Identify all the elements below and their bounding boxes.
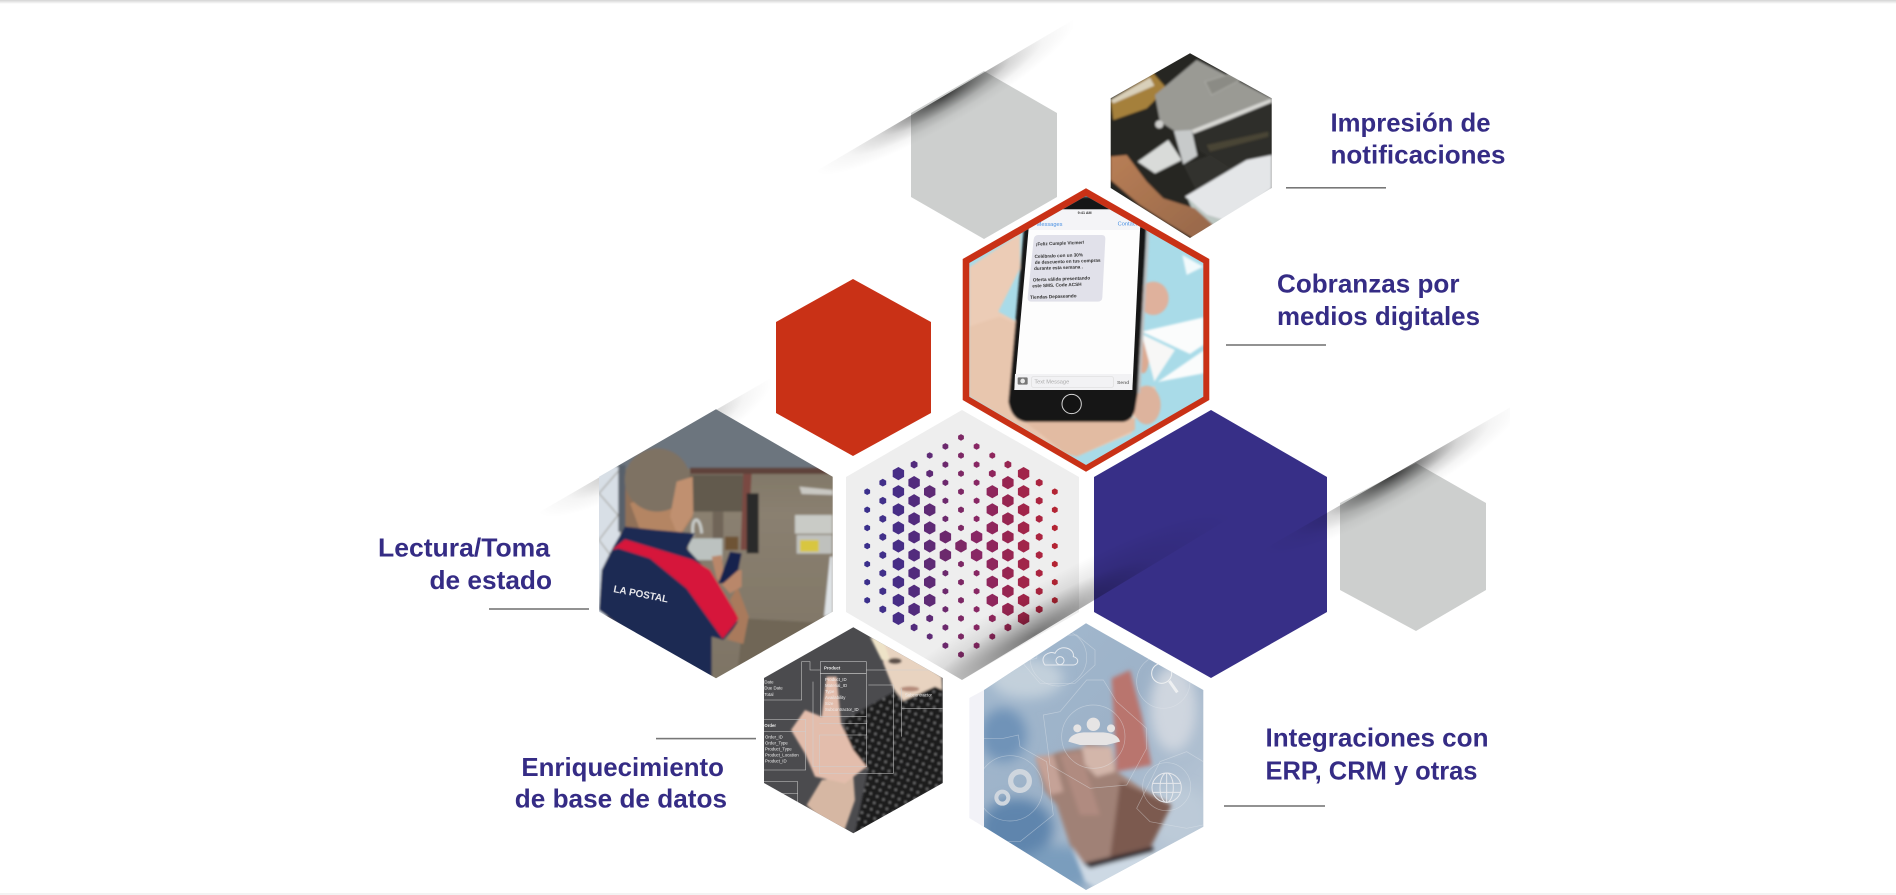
- photo: meter reader: [599, 409, 833, 678]
- diagram labels: Date: [764, 679, 774, 684]
- fold shadow across purple and right grey hexagons: [1301, 416, 1496, 532]
- icon: cloud: [1043, 648, 1078, 665]
- fold shadow across dotted and purple hexagons: [932, 550, 1170, 680]
- label: integraciones con erp crm y otras: Integraciones con: [1266, 723, 1488, 753]
- diagram labels: Order_Type: [765, 741, 788, 746]
- leader line: [489, 608, 589, 610]
- diagram labels: Due Date: [764, 686, 783, 691]
- diagram lines: [764, 662, 943, 807]
- diagram labels: Material_ID: [825, 683, 847, 688]
- diagram labels: Product: [824, 666, 841, 671]
- bottom page edge: [0, 893, 1896, 895]
- photo: woman and database diagram: [764, 627, 943, 834]
- diagram labels: Product_Type: [765, 747, 792, 752]
- phone interface labels: [1034, 211, 1138, 386]
- fold shadow on top grey hexagon: [843, 36, 1048, 158]
- label: enriquecimiento de base de datos: [515, 752, 727, 814]
- diagram labels: Subcontractor: [905, 693, 933, 698]
- red hexagon: [776, 279, 931, 456]
- label: enriquecimiento de base de datos: Enriquecimiento: [521, 752, 724, 782]
- photo: hand touching gear icons: [970, 623, 1204, 890]
- icon: people group: [1068, 718, 1120, 745]
- phone interface labels: Contact: [1118, 221, 1138, 227]
- diagram labels: Product_ID: [765, 759, 787, 764]
- icon: gears: [996, 772, 1029, 804]
- dotted hexagon panel: [846, 410, 1079, 680]
- label: enriquecimiento de base de datos: de base de datos: [515, 784, 727, 814]
- diagram labels: Availability: [825, 695, 846, 700]
- pale strip left of photo: [969, 690, 984, 827]
- label: cobranzas por medios digitales: [1277, 269, 1480, 331]
- label: lectura toma de estado: Lectura/Toma: [378, 532, 551, 562]
- phone interface labels: Messages: [1037, 222, 1063, 228]
- diagram labels: [764, 666, 933, 764]
- purple hexagon: [1094, 410, 1327, 678]
- diagram labels: Order_ID: [765, 735, 783, 740]
- label: lectura toma de estado: de estado: [430, 565, 552, 595]
- diagram labels: Product_Location: [765, 753, 799, 758]
- diagram labels: Subcontractor_ID: [825, 707, 859, 712]
- phone interface labels: Send: [1117, 380, 1129, 386]
- shirt logo text: LA POSTAL: [612, 584, 669, 606]
- diagram labels: Product_ID: [825, 677, 847, 682]
- leader line: [1286, 187, 1386, 189]
- message text: ¡Feliz Cumple Vicmer!: [1036, 240, 1085, 247]
- diagram labels: Size: [825, 701, 834, 706]
- diagram labels: Type: [825, 689, 835, 694]
- top page shadow: [0, 0, 1896, 4]
- icon: globe: [1152, 773, 1181, 802]
- red hexagon frame: [963, 188, 1209, 472]
- leader line: [656, 738, 756, 739]
- phone interface labels: Text Message: [1034, 379, 1069, 385]
- message text: Tiendas Depaseando: [1030, 293, 1077, 300]
- label: cobranzas por medios digitales: medios digitales: [1277, 301, 1480, 331]
- label: integraciones con erp crm y otras: [1266, 723, 1488, 785]
- icon: magnifier: [1152, 663, 1177, 692]
- fold shadow beside lectura photo: [563, 392, 748, 502]
- gear outlines: [977, 629, 1203, 842]
- photo: phone with SMS message: [962, 188, 1210, 472]
- grey hexagon top: [911, 71, 1057, 239]
- message text: de descuento en tus compras: [1035, 258, 1101, 265]
- photo: printing machine: [1110, 53, 1272, 238]
- diagram labels: Order: [764, 723, 776, 728]
- label: lectura toma de estado: [378, 532, 552, 595]
- message text: [1028, 239, 1102, 300]
- leader line: [1226, 344, 1326, 346]
- label: cobranzas por medios digitales: Cobranzas por: [1277, 269, 1460, 299]
- message text: Celébralo con un 30%: [1035, 252, 1084, 259]
- diagram labels: Total: [764, 692, 774, 697]
- label: impresión de notificaciones: notificaciones: [1330, 139, 1506, 169]
- grey hexagon right: [1340, 463, 1486, 631]
- label: impresión de notificaciones: [1330, 108, 1506, 169]
- message text: Oferta válida presentando: [1033, 275, 1090, 282]
- leader line: [1224, 805, 1325, 807]
- label: impresión de notificaciones: Impresión de: [1330, 108, 1490, 138]
- message text: este SMS. Code ACSH: [1032, 282, 1082, 288]
- label: integraciones con erp crm y otras: ERP, CRM y otras: [1266, 755, 1478, 785]
- message text: durante esta semana .: [1034, 264, 1083, 271]
- phone interface labels: 9:41 AM: [1078, 211, 1092, 215]
